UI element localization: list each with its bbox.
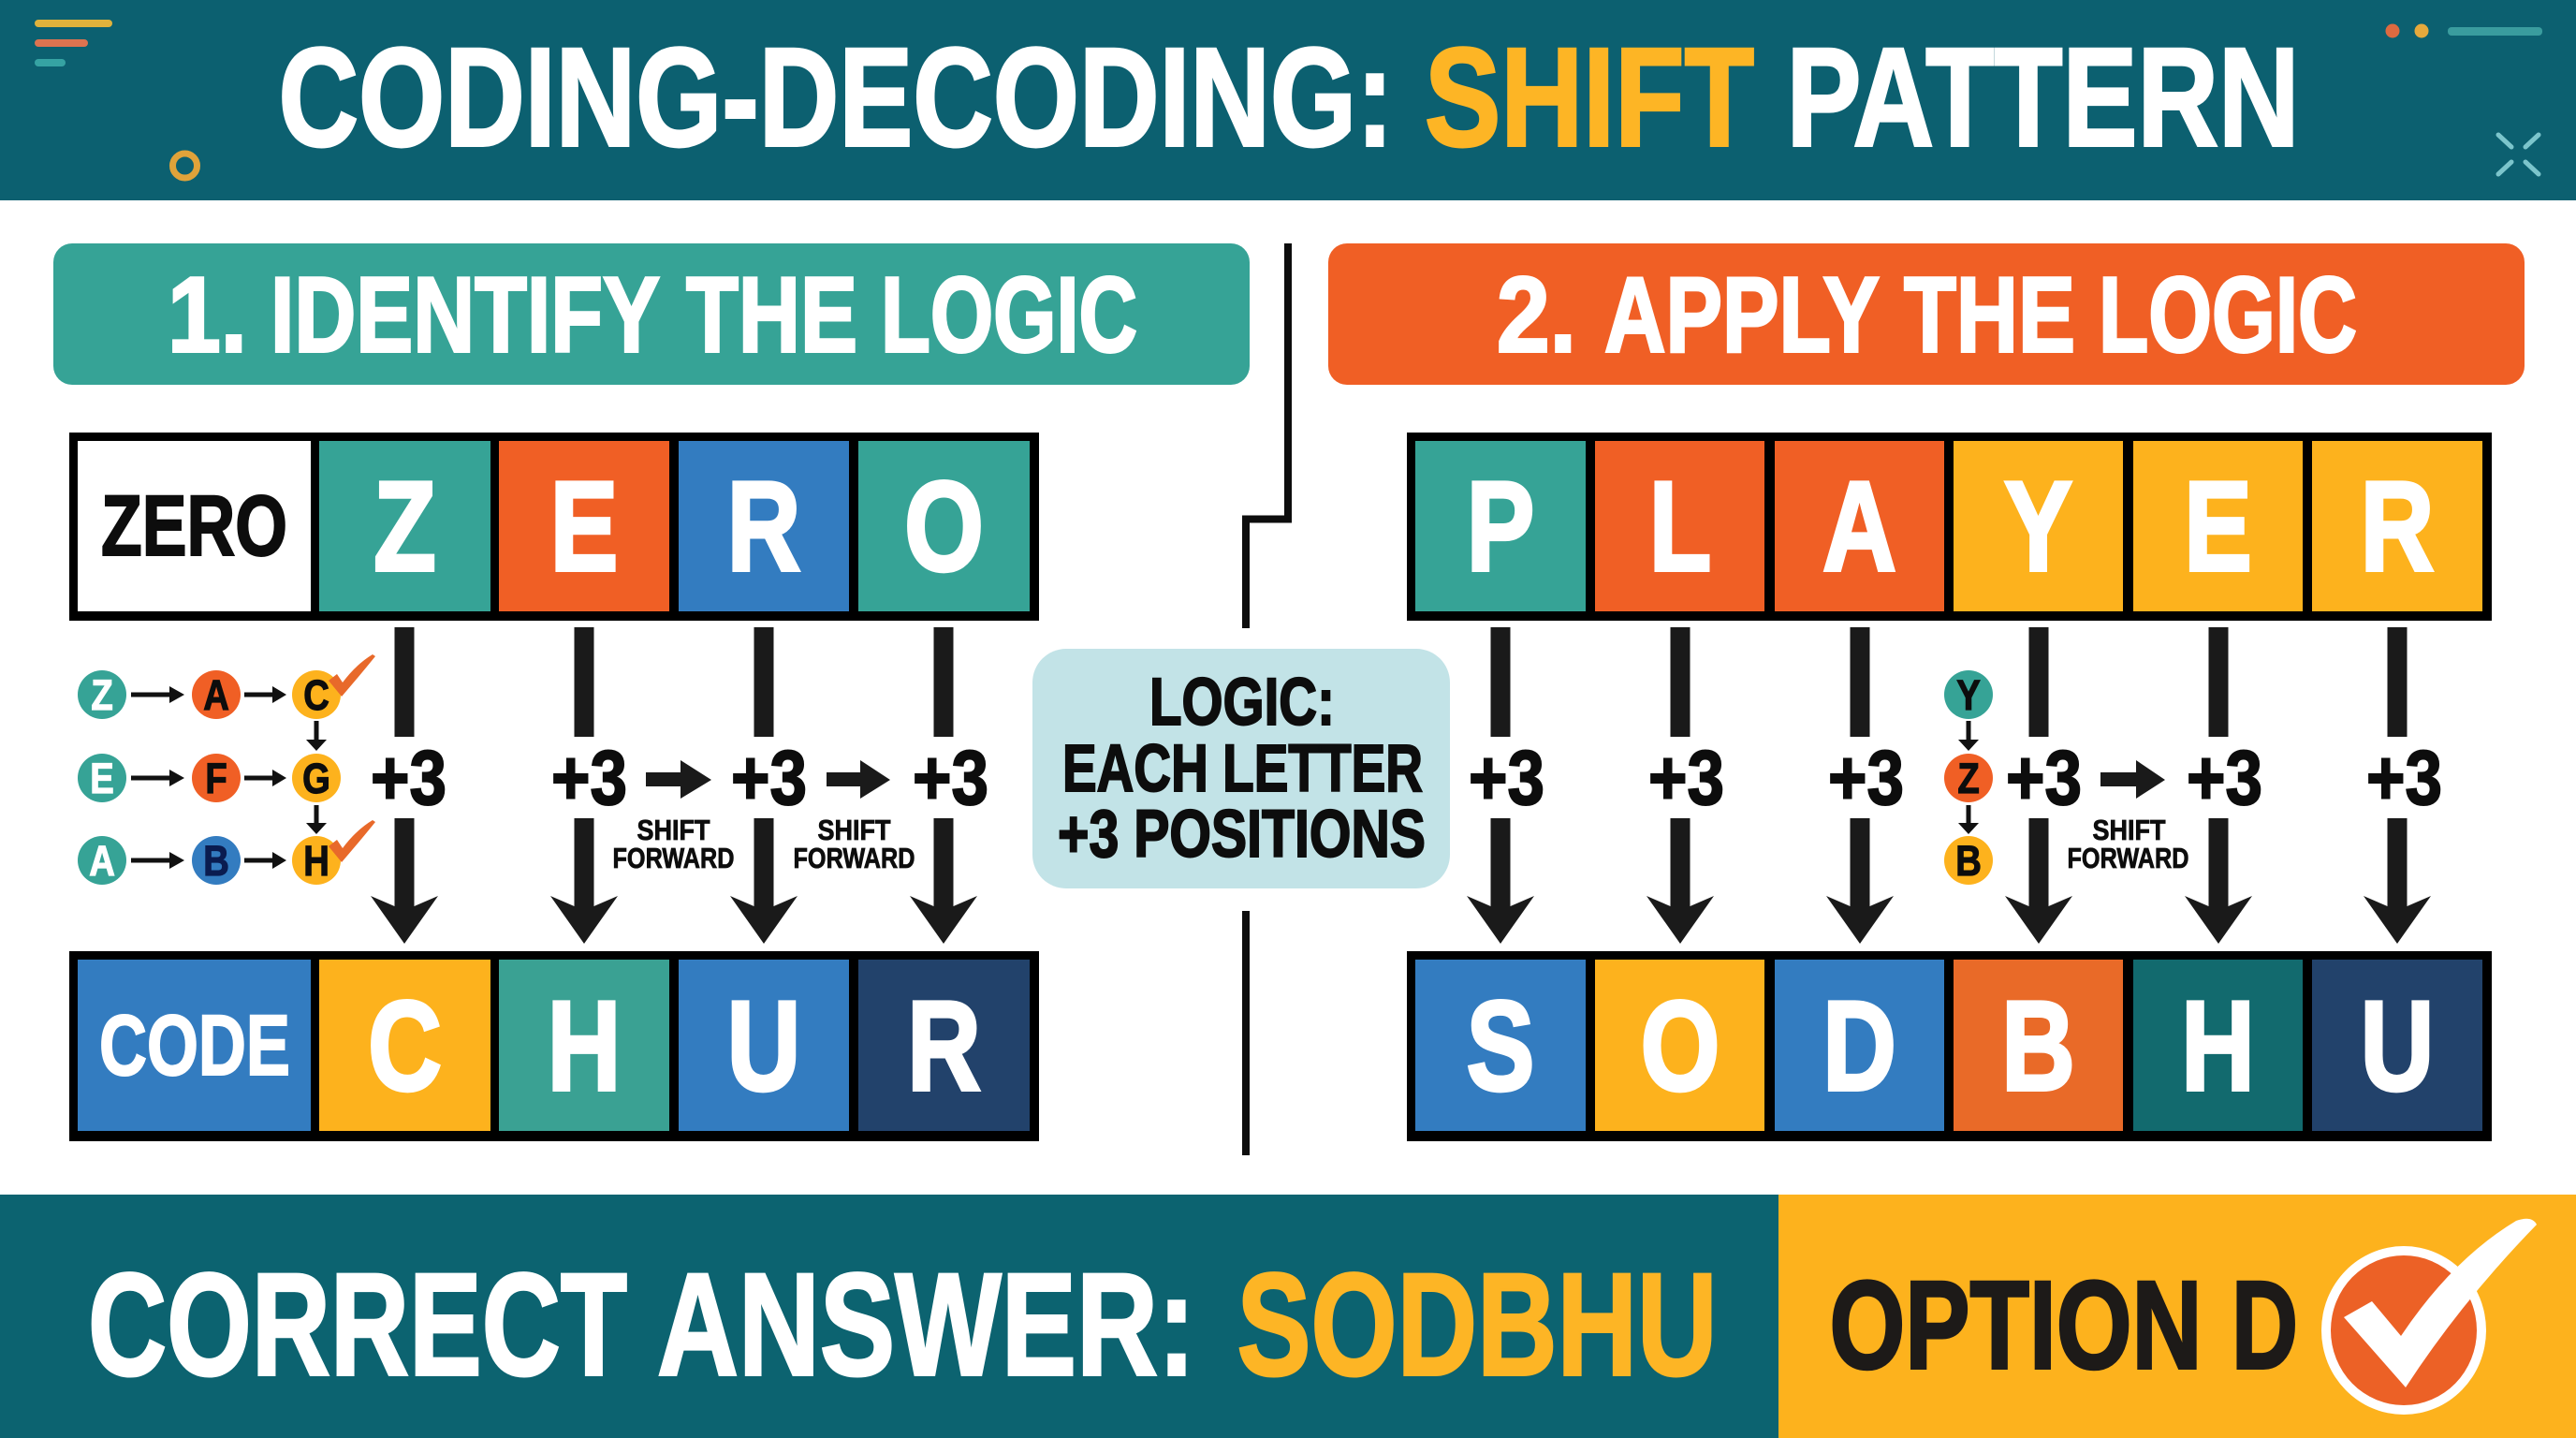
footer: correct answer: SODBHU <box>1237 1243 1717 1406</box>
footer: correct answer: CORRECT <box>88 1243 627 1406</box>
shift forward note 1 <box>612 760 734 874</box>
plus three labels: right panel: +3 <box>1648 734 1724 821</box>
table: SODBHU output: H <box>2181 976 2255 1118</box>
plus three labels: left panel: +3 <box>371 734 446 821</box>
table: SODBHU output: D <box>1822 976 1896 1118</box>
table: PLAYER input: A <box>1822 457 1896 598</box>
table: PLAYER input <box>1407 433 2492 621</box>
footer: option D: OPTION <box>1829 1256 2202 1395</box>
footer: correct answer: ANSWER: <box>657 1243 1195 1406</box>
table: SODBHU output: O <box>1641 976 1720 1118</box>
letter chain diagram: Z E A: A <box>89 837 115 885</box>
table: PLAYER input: P <box>1467 457 1534 598</box>
panel heading: apply the logic: APPLY <box>1604 257 1880 374</box>
letter chain diagram: Y: B <box>1955 837 1982 885</box>
plus three labels: left panel <box>371 734 988 821</box>
logic callout: LOGIC: <box>1149 666 1335 740</box>
plus three labels: right panel: +3 <box>1469 734 1544 821</box>
panel heading: identify the logic: IDENTIFY <box>271 257 660 374</box>
shift forward note 3: FORWARD <box>2067 842 2188 874</box>
plus three labels: left panel: +3 <box>731 734 807 821</box>
down arrows: right panel <box>1467 627 2431 944</box>
shift forward note 3: SHIFT <box>2093 814 2166 846</box>
plus three labels: right panel: +3 <box>2187 734 2262 821</box>
table: ZERO input: ZERO <box>101 478 287 574</box>
panel heading: apply the logic: THE <box>1904 257 2075 374</box>
table: SODBHU output: S <box>1467 976 1534 1118</box>
footer: correct answer <box>0 1195 1778 1438</box>
letter chain diagram: Z E A: G <box>302 755 330 802</box>
icon: orange check marks <box>329 654 375 862</box>
table: PLAYER input: R <box>2361 457 2434 598</box>
table: CODE output: C <box>368 976 442 1118</box>
panel heading: apply the logic: LOGIC <box>2099 257 2357 374</box>
letter chain diagram: Z E A: F <box>205 755 227 802</box>
plus three labels: right panel: +3 <box>2006 734 2082 821</box>
letter chain diagram: Y <box>1944 670 1993 885</box>
title <box>279 19 2299 176</box>
panel heading: identify the logic: THE <box>686 257 857 374</box>
table: CODE output: R <box>907 976 981 1118</box>
title: SHIFT <box>1425 19 1754 176</box>
shift forward note 2 <box>794 760 915 874</box>
panel heading: apply the logic <box>1328 243 2525 385</box>
plus three labels: right panel: +3 <box>1828 734 1904 821</box>
letter chain diagram: Z E A: H <box>303 837 329 885</box>
panel heading: identify the logic: 1. <box>168 257 247 374</box>
footer: option D <box>1778 1195 2576 1438</box>
logic callout: +3 POSITIONS <box>1058 798 1426 872</box>
footer: option D: D <box>2232 1256 2298 1395</box>
table: CODE output: U <box>727 976 800 1118</box>
table: SODBHU output <box>1407 951 2492 1141</box>
table: PLAYER input: E <box>2184 457 2252 598</box>
decor: top-left bars <box>35 20 112 66</box>
decor: cross marks <box>2498 135 2539 174</box>
table: ZERO input: R <box>727 457 800 598</box>
shift forward note 1: SHIFT <box>637 814 710 846</box>
panel heading: identify the logic <box>53 243 1250 385</box>
letter chain diagram: Z E A: A <box>203 671 229 719</box>
shift forward note 3 <box>2067 760 2188 874</box>
decor: ring <box>172 154 197 178</box>
plus three labels: left panel: +3 <box>913 734 988 821</box>
logic callout: EACH LETTER <box>1062 732 1423 806</box>
table: SODBHU output: B <box>2001 976 2075 1118</box>
down arrows: left panel <box>371 627 977 944</box>
letter chain diagram: Y: Z <box>1957 755 1980 802</box>
title: CODING-DECODING: <box>279 19 1393 176</box>
table: ZERO input: O <box>904 457 984 598</box>
letter chain diagram: Y: Y <box>1956 671 1981 719</box>
table: CODE output: CODE <box>99 998 290 1093</box>
shift forward note 1: FORWARD <box>612 842 734 874</box>
letter chain diagram: Z E A: Z <box>91 671 113 719</box>
plus three labels: right panel: +3 <box>2366 734 2442 821</box>
center divider <box>1246 243 1288 1155</box>
shift forward note 2: FORWARD <box>794 842 915 874</box>
panel heading: identify the logic: LOGIC <box>881 257 1137 374</box>
letter chain diagram: Z E A: E <box>90 755 114 802</box>
title: PATTERN <box>1786 19 2299 176</box>
logic callout <box>1032 649 1450 888</box>
shift forward note 2: SHIFT <box>818 814 891 846</box>
panel heading: apply the logic: 2. <box>1497 257 1576 374</box>
table: SODBHU output: U <box>2361 976 2434 1118</box>
table: CODE output <box>69 951 1039 1141</box>
plus three labels: right panel <box>1469 734 2442 821</box>
header band <box>0 0 2576 200</box>
plus three labels: left panel: +3 <box>551 734 627 821</box>
table: PLAYER input: L <box>1649 457 1711 598</box>
letter chain diagram: Z E A <box>78 654 375 885</box>
icon: check badge <box>2321 1219 2537 1415</box>
table: PLAYER input: Y <box>2004 457 2072 598</box>
letter chain diagram: Z E A: B <box>203 837 229 885</box>
table: CODE output: H <box>548 976 621 1118</box>
decor: top-right dots and bar <box>2385 24 2542 37</box>
table: ZERO input: E <box>550 457 618 598</box>
letter chain diagram: Z E A: C <box>303 671 329 719</box>
table: ZERO input <box>69 433 1039 621</box>
table: ZERO input: Z <box>373 457 436 598</box>
